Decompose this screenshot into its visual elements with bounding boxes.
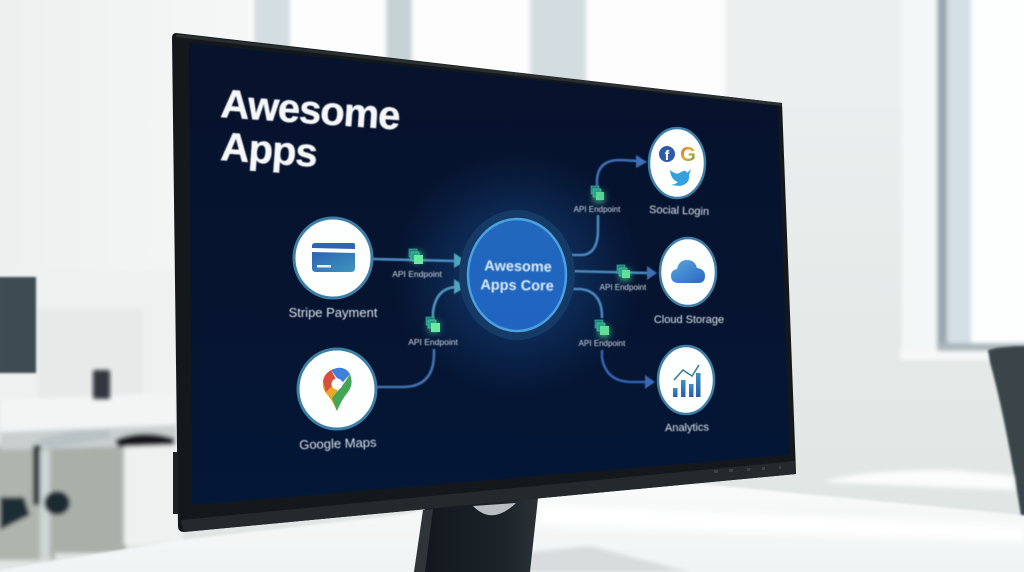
API endpoint chip: maps (426, 317, 440, 332)
API endpoint chip: cloud storage (617, 265, 630, 280)
stripe circle (294, 218, 372, 298)
table top (0, 470, 1024, 572)
icon: credit card (312, 243, 355, 272)
label: API endpoint, cloud storage: API Endpoint (600, 283, 647, 292)
title: Awesome (219, 82, 401, 138)
pencil cup (93, 370, 110, 399)
arrow: stripe to core (373, 253, 466, 268)
label: API endpoint, maps: API Endpoint (408, 337, 458, 347)
arrow: core to cloud storage (567, 266, 657, 280)
API endpoint chip: analytics (595, 320, 609, 337)
node: Social Login (649, 128, 709, 218)
analytics circle (658, 346, 714, 414)
label: API endpoint, social login: API Endpoint (574, 205, 621, 214)
node: Analytics (658, 346, 714, 434)
icon: twitter bird (670, 169, 691, 186)
core label: Apps Core (480, 277, 554, 295)
arrow: maps to core (377, 279, 466, 387)
side buttons (173, 452, 178, 514)
arrow: core to analytics (567, 289, 655, 389)
node: Google Maps (298, 349, 377, 452)
label: Analytics: Analytics (665, 422, 710, 434)
node: Awesome Apps Core (459, 210, 575, 340)
core circle (468, 219, 566, 331)
API endpoint chip: social login (591, 186, 604, 202)
API endpoint chip: stripe (409, 249, 423, 264)
monitor (172, 33, 796, 572)
social circle (649, 128, 705, 198)
icon: map pin (323, 368, 352, 411)
connector arrows (373, 155, 657, 389)
label: Google Maps: Google Maps (299, 435, 377, 452)
core label: Awesome (484, 258, 552, 276)
label: API endpoint, stripe: API Endpoint (392, 269, 442, 279)
node: Cloud Storage (654, 238, 724, 326)
core label (480, 258, 554, 295)
label: API endpoint, analytics: API Endpoint (579, 339, 626, 348)
cloud circle (660, 238, 716, 306)
title: Apps (219, 125, 318, 176)
background monitor (0, 277, 36, 373)
icon: google: G (680, 144, 696, 166)
background: blurred desk with monitor, cup and chair on the left (0, 270, 185, 560)
maps circle (298, 349, 376, 429)
title (219, 82, 401, 176)
monitor bezel (172, 33, 796, 532)
core halo (459, 210, 575, 340)
background: chair on the right (988, 346, 1024, 518)
label: Social Login: Social Login (649, 204, 709, 218)
arrow: core to social login (566, 155, 647, 255)
icon: facebook: f (665, 147, 670, 163)
bezel control buttons (714, 466, 781, 473)
screen (189, 43, 790, 505)
label: Cloud Storage: Cloud Storage (654, 314, 724, 326)
monitor stand (414, 498, 538, 572)
icon: cloud (671, 260, 705, 283)
node: Stripe Payment (289, 218, 378, 320)
label: Stripe Payment: Stripe Payment (289, 305, 378, 320)
icon: bar chart with trend line (673, 365, 700, 397)
